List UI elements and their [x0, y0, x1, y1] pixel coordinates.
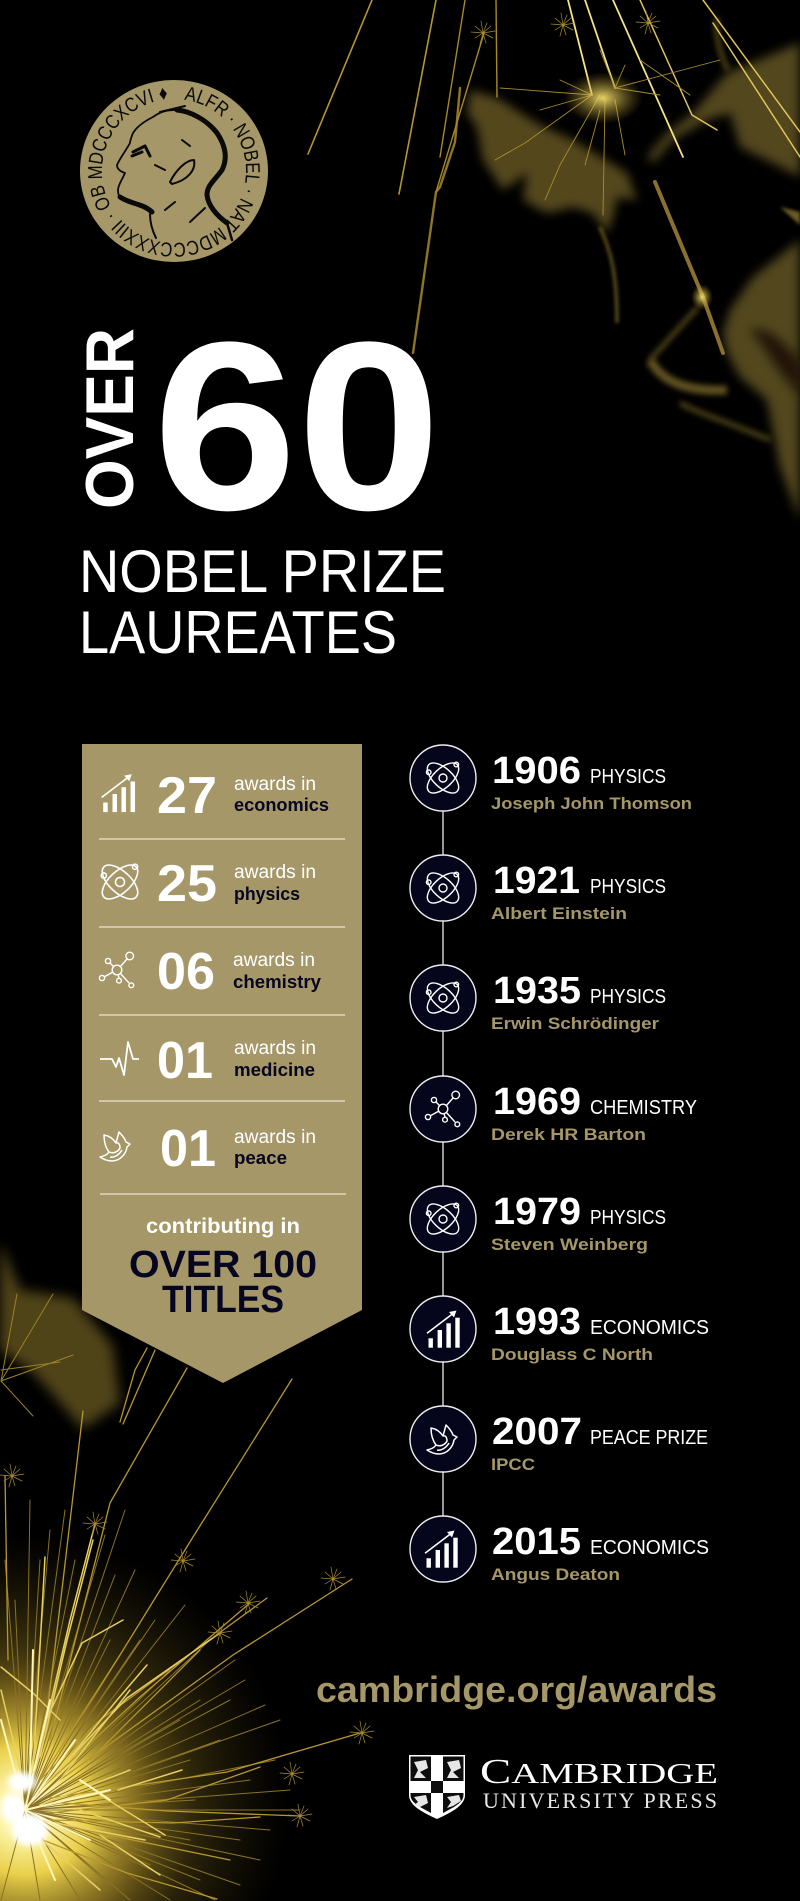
entry: 1979 — [410, 1186, 666, 1254]
entry: 1969 — [410, 1076, 697, 1144]
row: chemistry: 06 — [157, 943, 215, 1001]
sparkler white core — [1, 1772, 48, 1846]
entry: 2007: IPCC — [491, 1455, 535, 1474]
big number 60: 60 — [153, 292, 441, 560]
row: physics: awards in — [234, 862, 316, 883]
callout: over 100 titles — [129, 1215, 317, 1321]
row: physics: physics — [234, 884, 300, 904]
row: peace: awards in — [234, 1127, 316, 1148]
entry: 1969: CHEMISTRY — [590, 1097, 697, 1119]
entry: 1993: ECONOMICS — [590, 1317, 709, 1339]
entry: 1993 — [410, 1296, 709, 1364]
entry: 1969: 1969 — [493, 1081, 581, 1123]
entry: 2015: 2015 — [492, 1521, 581, 1563]
entry: 2007 — [410, 1406, 708, 1474]
medal: Alfred Nobel — [80, 80, 268, 262]
sparkler burst: bottom left — [0, 1294, 374, 1901]
entry: 1979: Steven Weinberg — [491, 1235, 648, 1254]
row: economics: 27 — [157, 767, 217, 825]
row: economics: economics — [234, 795, 329, 815]
row: peace — [100, 1120, 316, 1178]
entry: 2015 — [410, 1516, 709, 1584]
entry: 2015: ECONOMICS — [590, 1537, 709, 1559]
heading: Nobel Prize Laureates: NOBEL PRIZE — [79, 538, 446, 605]
row: economics — [102, 767, 329, 825]
heading: OVER 60 — [72, 292, 441, 560]
entry: 1935: Erwin Schrödinger — [491, 1014, 659, 1033]
entry: 2007: 2007 — [492, 1411, 582, 1453]
entry: 1921: Albert Einstein — [491, 904, 627, 923]
callout: over 100 titles: contributing in — [146, 1215, 300, 1238]
logo: Cambridge University Press — [409, 1752, 718, 1819]
heading: Nobel Prize Laureates — [79, 538, 446, 666]
entry: 1921 — [410, 855, 666, 923]
logo: Cambridge University Press: C AMBRIDGE — [480, 1752, 718, 1791]
row: medicine: medicine — [234, 1060, 315, 1080]
medal inscription: ALFR · NOBEL · NAT MDCCCXXXIII · OB MDCCCXCVI ♦ — [88, 87, 260, 257]
timeline: laureates — [410, 745, 709, 1584]
entry: 1906: 1906 — [492, 750, 581, 792]
row: chemistry: chemistry — [233, 972, 321, 992]
entry: 1906: PHYSICS — [590, 766, 666, 788]
sparks: top right — [308, 0, 800, 353]
entry: 1921: PHYSICS — [590, 876, 666, 898]
row: medicine: awards in — [234, 1038, 316, 1059]
entry: 1906: Joseph John Thomson — [491, 794, 692, 813]
row: physics — [97, 855, 316, 913]
row: physics: 25 — [157, 855, 217, 913]
smoke: bottom left — [0, 1242, 120, 1429]
callout: over 100 titles: TITLES — [162, 1279, 284, 1321]
medal portrait — [117, 106, 232, 240]
row: peace: 01 — [160, 1120, 216, 1178]
row: chemistry — [99, 943, 321, 1001]
entry: 1969: Derek HR Barton — [491, 1125, 646, 1144]
heading: Nobel Prize Laureates: LAUREATES — [79, 599, 397, 666]
entry: 1979: 1979 — [493, 1191, 581, 1233]
icon: shield — [409, 1755, 465, 1819]
icon: pulse — [100, 1042, 139, 1075]
entry: 1921: 1921 — [493, 860, 580, 902]
entry: 2015: Angus Deaton — [491, 1565, 620, 1584]
logo: Cambridge University Press: UNIVERSITY PRESS — [483, 1788, 717, 1813]
entry: 2007: PEACE PRIZE — [590, 1427, 708, 1449]
row: medicine — [100, 1032, 316, 1090]
smoke: top right — [467, 17, 800, 520]
row: peace: peace — [234, 1148, 287, 1168]
entry: 1935: PHYSICS — [590, 986, 666, 1008]
callout: over 100 titles: OVER 100 — [129, 1244, 317, 1286]
panel: awards by subject — [82, 744, 362, 1383]
website link: cambridge.org/awards — [316, 1669, 717, 1710]
row: chemistry: awards in — [233, 950, 315, 971]
row: medicine: 01 — [157, 1032, 213, 1090]
vertical word OVER: OVER — [72, 328, 148, 509]
entry: 1906 — [410, 745, 692, 813]
entry: 1979: PHYSICS — [590, 1207, 666, 1229]
entry: 1993: 1993 — [493, 1301, 581, 1343]
row: economics: awards in — [234, 774, 316, 795]
entry: 1993: Douglass C North — [491, 1345, 653, 1364]
entry: 1935: 1935 — [493, 970, 581, 1012]
entry: 1935 — [410, 965, 666, 1033]
